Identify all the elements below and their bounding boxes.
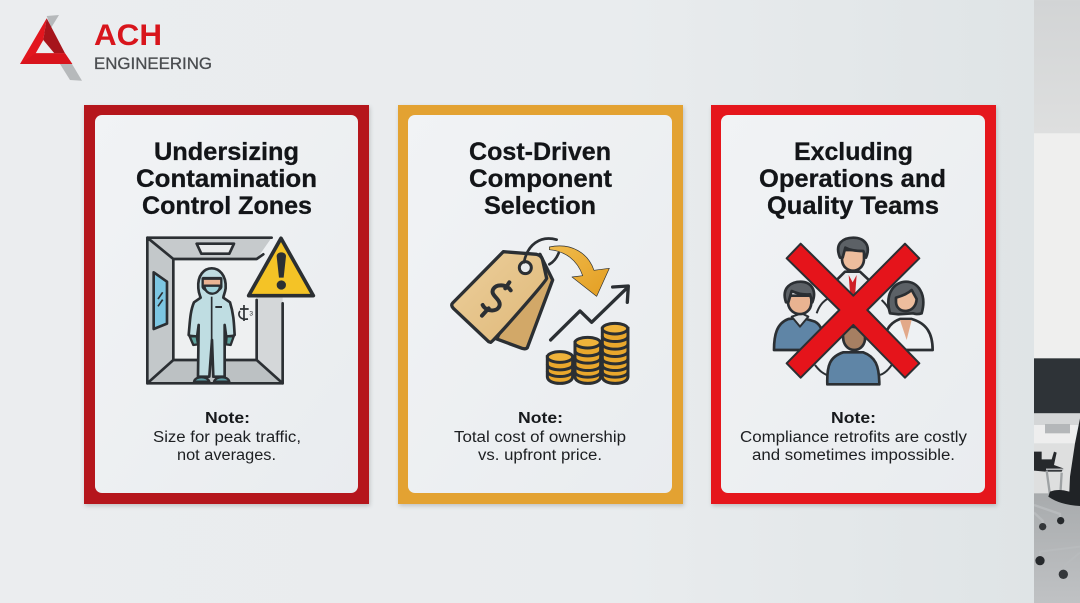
heading [759,138,946,220]
icon: cleanroom airlock with suited worker and warning [147,238,313,383]
note: Note: [205,410,250,427]
heading: Component [469,165,613,193]
trend arrow [551,286,628,340]
heading [136,138,317,220]
note: not averages. [177,447,276,464]
heading: Selection [484,192,596,220]
note: Note: [831,410,876,427]
panel: cost-driven component selection [398,105,683,504]
note: Total cost of ownership [454,429,626,446]
top person [835,272,871,297]
left person [774,318,823,350]
note: Size for peak traffic, [153,429,301,446]
right person [884,319,933,350]
red cross [787,244,919,378]
heading: Cost-Driven [469,138,611,166]
logo: ACH Engineering [20,15,212,81]
heading: Undersizing [154,138,299,166]
worker [189,268,235,377]
heading: Contamination [136,165,317,193]
note: and sometimes impossible. [752,447,955,464]
note [153,410,301,464]
note [740,410,967,464]
note: Note: [518,410,563,427]
heading [469,138,613,220]
icon: price tags, arrows and coins [452,239,628,383]
coin stacks [547,323,628,383]
panel frame [84,105,369,504]
logo wordmark: ACH [94,19,162,52]
note: vs. upfront price. [478,447,602,464]
heading: Operations and [759,165,946,193]
logo: ACH Engineering: ENGINEERING [94,54,212,73]
curved arrow [549,246,609,296]
icon: crossed-out team [774,238,933,384]
panel: undersizing contamination control zones [84,105,369,504]
office photo strip [1034,0,1080,603]
note [454,410,626,464]
heading: Quality Teams [767,192,939,220]
bottom person [827,352,879,384]
panel frame [398,105,683,504]
heading: Control Zones [142,192,312,220]
warning triangle [249,238,313,296]
heading: Excluding [794,138,913,166]
note: Compliance retrofits are costly [740,429,967,446]
icon: cleanroom airlock with suited worker and warning: 3 [249,311,253,318]
logo mark [20,15,82,81]
panel: excluding operations and quality teams [711,105,996,504]
panel frame [711,105,996,504]
